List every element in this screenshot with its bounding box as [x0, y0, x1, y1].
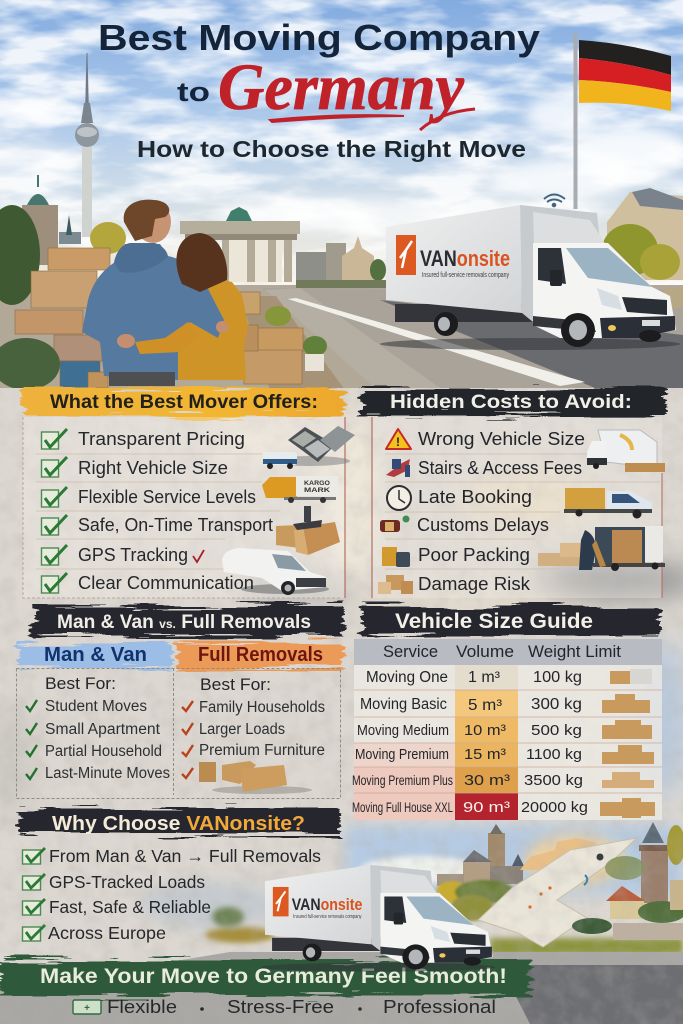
subtitle: How to Choose the Right Move	[137, 136, 526, 162]
texture overlay	[0, 388, 683, 1024]
row: moving one: 1 m³	[468, 669, 500, 686]
woman: jacket	[178, 280, 248, 380]
icon: banknote	[73, 1000, 101, 1014]
banner: What the Best Mover Offers: What the Best Mover Offers:	[50, 392, 318, 413]
row: moving premium plus: 30 m³	[464, 772, 510, 789]
scenery: trees under castle	[436, 880, 515, 921]
banner: Hidden Costs to Avoid	[362, 389, 666, 416]
icon: furniture boxes	[199, 761, 312, 794]
scenery: castle	[437, 824, 524, 886]
icon: yellow van	[262, 476, 338, 503]
item: fast safe reliable: Fast, Safe & Reliable	[49, 897, 211, 917]
table header: Service	[383, 642, 438, 661]
footer tags: Professional	[383, 997, 496, 1017]
row: moving premium plus	[352, 772, 583, 789]
row: moving premium: 1100 kg	[526, 746, 582, 763]
item: across europe: Across Europe	[48, 923, 166, 943]
panel: offers	[23, 417, 355, 598]
row: moving premium	[355, 746, 582, 763]
row: moving full house XXL	[352, 799, 588, 816]
woman: sleeve	[135, 322, 200, 354]
van: VANonsite lower: Insured full-service removals company	[293, 914, 362, 920]
row: moving medium: 500 kg	[531, 722, 582, 739]
icon: yellow van: KARGO	[304, 481, 330, 487]
couple embracing	[82, 200, 248, 386]
table header: Volume	[456, 642, 514, 661]
moving boxes stack left	[15, 248, 110, 388]
column: Full Removals list	[182, 675, 325, 778]
row: moving medium: Moving Medium	[357, 722, 449, 739]
banner: Make Your Move to Germany: Make Your Move to Germany Feel Smooth!	[40, 965, 507, 988]
table header: Weight Limit	[528, 642, 621, 661]
row: moving basic: 300 kg	[531, 696, 582, 713]
banner: Make Your Move to Germany	[0, 960, 530, 996]
man: jacket	[82, 244, 224, 380]
banner: Why Choose VANonsite: Why Choose VANonsite?	[52, 813, 305, 835]
table: pink service cells	[354, 743, 455, 820]
row: moving basic	[360, 696, 582, 714]
panel: hidden costs	[372, 417, 665, 598]
icon: yellow van: MARK	[304, 488, 331, 494]
landmark: cathedral	[22, 175, 81, 265]
footer tags: Flexible	[107, 997, 177, 1017]
scenery: map of Germany	[478, 838, 637, 947]
column: Full Removals list: Premium Furniture	[199, 742, 325, 759]
item: customs delays: Customs Delays	[417, 515, 549, 535]
shrubs left	[0, 338, 60, 390]
item: GPS-tracked loads: GPS-Tracked Loads	[49, 872, 205, 892]
banner: Man & Van vs. Full Removals: Man & Van vs. Full Removals	[57, 612, 311, 633]
wifi icon	[544, 194, 565, 206]
table: volume column	[455, 665, 518, 820]
man: hood	[114, 243, 168, 273]
item: stairs and access fees: Stairs & Access Fees	[418, 458, 582, 478]
background: ground and road	[0, 285, 683, 390]
banner: Man & Van vs. Full Removals	[32, 606, 344, 636]
title: Best Moving Company	[98, 17, 540, 58]
row: moving full house XXL: Moving Full House XXL	[352, 800, 453, 815]
item: GPS tracking	[42, 545, 204, 565]
item: man and van to full removals: From Man & Van → Full Removals	[49, 846, 321, 866]
flag of Germany	[574, 33, 671, 209]
man: trousers	[109, 372, 175, 386]
row: moving full house XXL: 90 m³	[463, 799, 510, 816]
background: road bottom	[0, 952, 683, 1024]
scenery: stone tower and village	[572, 822, 683, 940]
landmark: Brandenburg Gate	[180, 207, 300, 282]
landmark: TV tower	[75, 53, 99, 237]
column: Man & Van list: Small Apartment	[45, 721, 161, 738]
row: moving full house XXL: 20000 kg	[521, 799, 588, 816]
icon: boxes and scanner	[276, 506, 340, 555]
sub-banner: Full Removals: Full Removals	[198, 644, 323, 666]
item: wrong vehicle size: Wrong Vehicle Size	[418, 429, 585, 449]
list: why choose	[22, 846, 321, 943]
title: to: to	[177, 77, 210, 107]
column: Man & Van list: Student Moves	[45, 698, 147, 715]
item: late booking: Late Booking	[418, 487, 532, 507]
row: moving basic: 5 m³	[468, 697, 502, 714]
van: VANonsite hero: VANonsite	[420, 246, 510, 271]
column: Full Removals list: Best For:	[200, 675, 271, 694]
icon: calculator and van	[263, 426, 355, 469]
background: sky	[0, 0, 683, 300]
column: Man & Van list: Last-Minute Moves	[45, 765, 170, 782]
background: lower concrete panel	[0, 388, 683, 1024]
landmark: palace right	[602, 188, 683, 308]
footer tags	[73, 997, 496, 1017]
item: flexible service levels: Flexible Service Levels	[78, 487, 256, 507]
item: safe on-time transport: Safe, On-Time Transport	[78, 515, 273, 535]
row: moving medium: 10 m³	[464, 722, 506, 739]
row: moving one	[366, 669, 582, 686]
footer tags: Stress-Free	[227, 997, 334, 1017]
item: right vehicle size: Right Vehicle Size	[78, 458, 228, 478]
item: clear communication: Clear Communication	[78, 573, 254, 593]
row: moving premium plus: 3500 kg	[524, 772, 583, 789]
buildings behind the gate	[296, 236, 386, 288]
row: moving one: Moving One	[366, 669, 448, 686]
table header	[354, 639, 662, 665]
column: Man & Van list: Best For:	[45, 674, 116, 693]
item: poor packing	[382, 545, 530, 567]
table: vehicle size guide	[352, 639, 662, 820]
banner: Vehicle Size Guide: Vehicle Size Guide	[395, 610, 593, 633]
item: poor packing: Poor Packing	[418, 545, 530, 565]
woman: hand	[117, 334, 135, 348]
item: GPS tracking: GPS Tracking	[78, 545, 188, 565]
column: Full Removals list: Larger Loads	[199, 721, 285, 738]
row: moving basic: Moving Basic	[360, 696, 447, 713]
row: moving one: 100 kg	[533, 669, 582, 686]
row: moving premium plus: Moving Premium Plus	[352, 773, 453, 788]
icon: banknote: +	[84, 1003, 90, 1014]
moving boxes right of couple	[240, 292, 303, 384]
column: Man & Van list	[26, 674, 170, 782]
van: VANonsite hero: Insured full-service removals company	[422, 272, 509, 279]
icon: white truck and boxes	[587, 430, 665, 472]
banner: Why Choose VANonsite	[18, 808, 340, 835]
background: lower right scenery	[140, 825, 683, 955]
van: VANonsite hero	[380, 205, 680, 350]
banner: What the Best Mover Offers	[22, 389, 344, 416]
panel: comparison lists	[16, 668, 340, 798]
sub-banner: Man & Van	[17, 643, 172, 668]
icon: mover and van with boxes	[538, 526, 665, 571]
item: late booking	[387, 486, 532, 510]
item: wrong vehicle size: !	[396, 435, 400, 449]
woman: hair	[176, 233, 227, 292]
row: moving premium: 15 m³	[464, 746, 506, 763]
column: Full Removals list: Family Households	[199, 699, 325, 716]
man: hair	[124, 200, 169, 241]
icon: flatbed truck with boxes	[564, 488, 652, 518]
van: VANonsite lower: VANonsite	[292, 895, 362, 914]
icon: box stacks per row	[600, 669, 655, 818]
man: head	[135, 201, 171, 243]
row: moving premium: Moving Premium	[355, 746, 449, 763]
banner: Hidden Costs to Avoid: Hidden Costs to Avoid:	[390, 392, 632, 413]
trees left	[0, 205, 126, 305]
title: Germany script: Germany	[218, 51, 465, 124]
item: damage risk: Damage Risk	[418, 574, 531, 594]
van: VANonsite lower	[260, 865, 496, 972]
sub-banner: Man & Van: Man & Van	[44, 644, 147, 666]
icon: white van	[222, 548, 329, 595]
row: moving medium	[357, 722, 582, 739]
item: transparent pricing: Transparent Pricing	[78, 429, 245, 449]
potted plant	[265, 306, 327, 371]
column: Man & Van list: Partial Household	[45, 743, 162, 760]
banner: Vehicle Size Guide	[362, 606, 660, 636]
man: hand	[216, 321, 228, 333]
